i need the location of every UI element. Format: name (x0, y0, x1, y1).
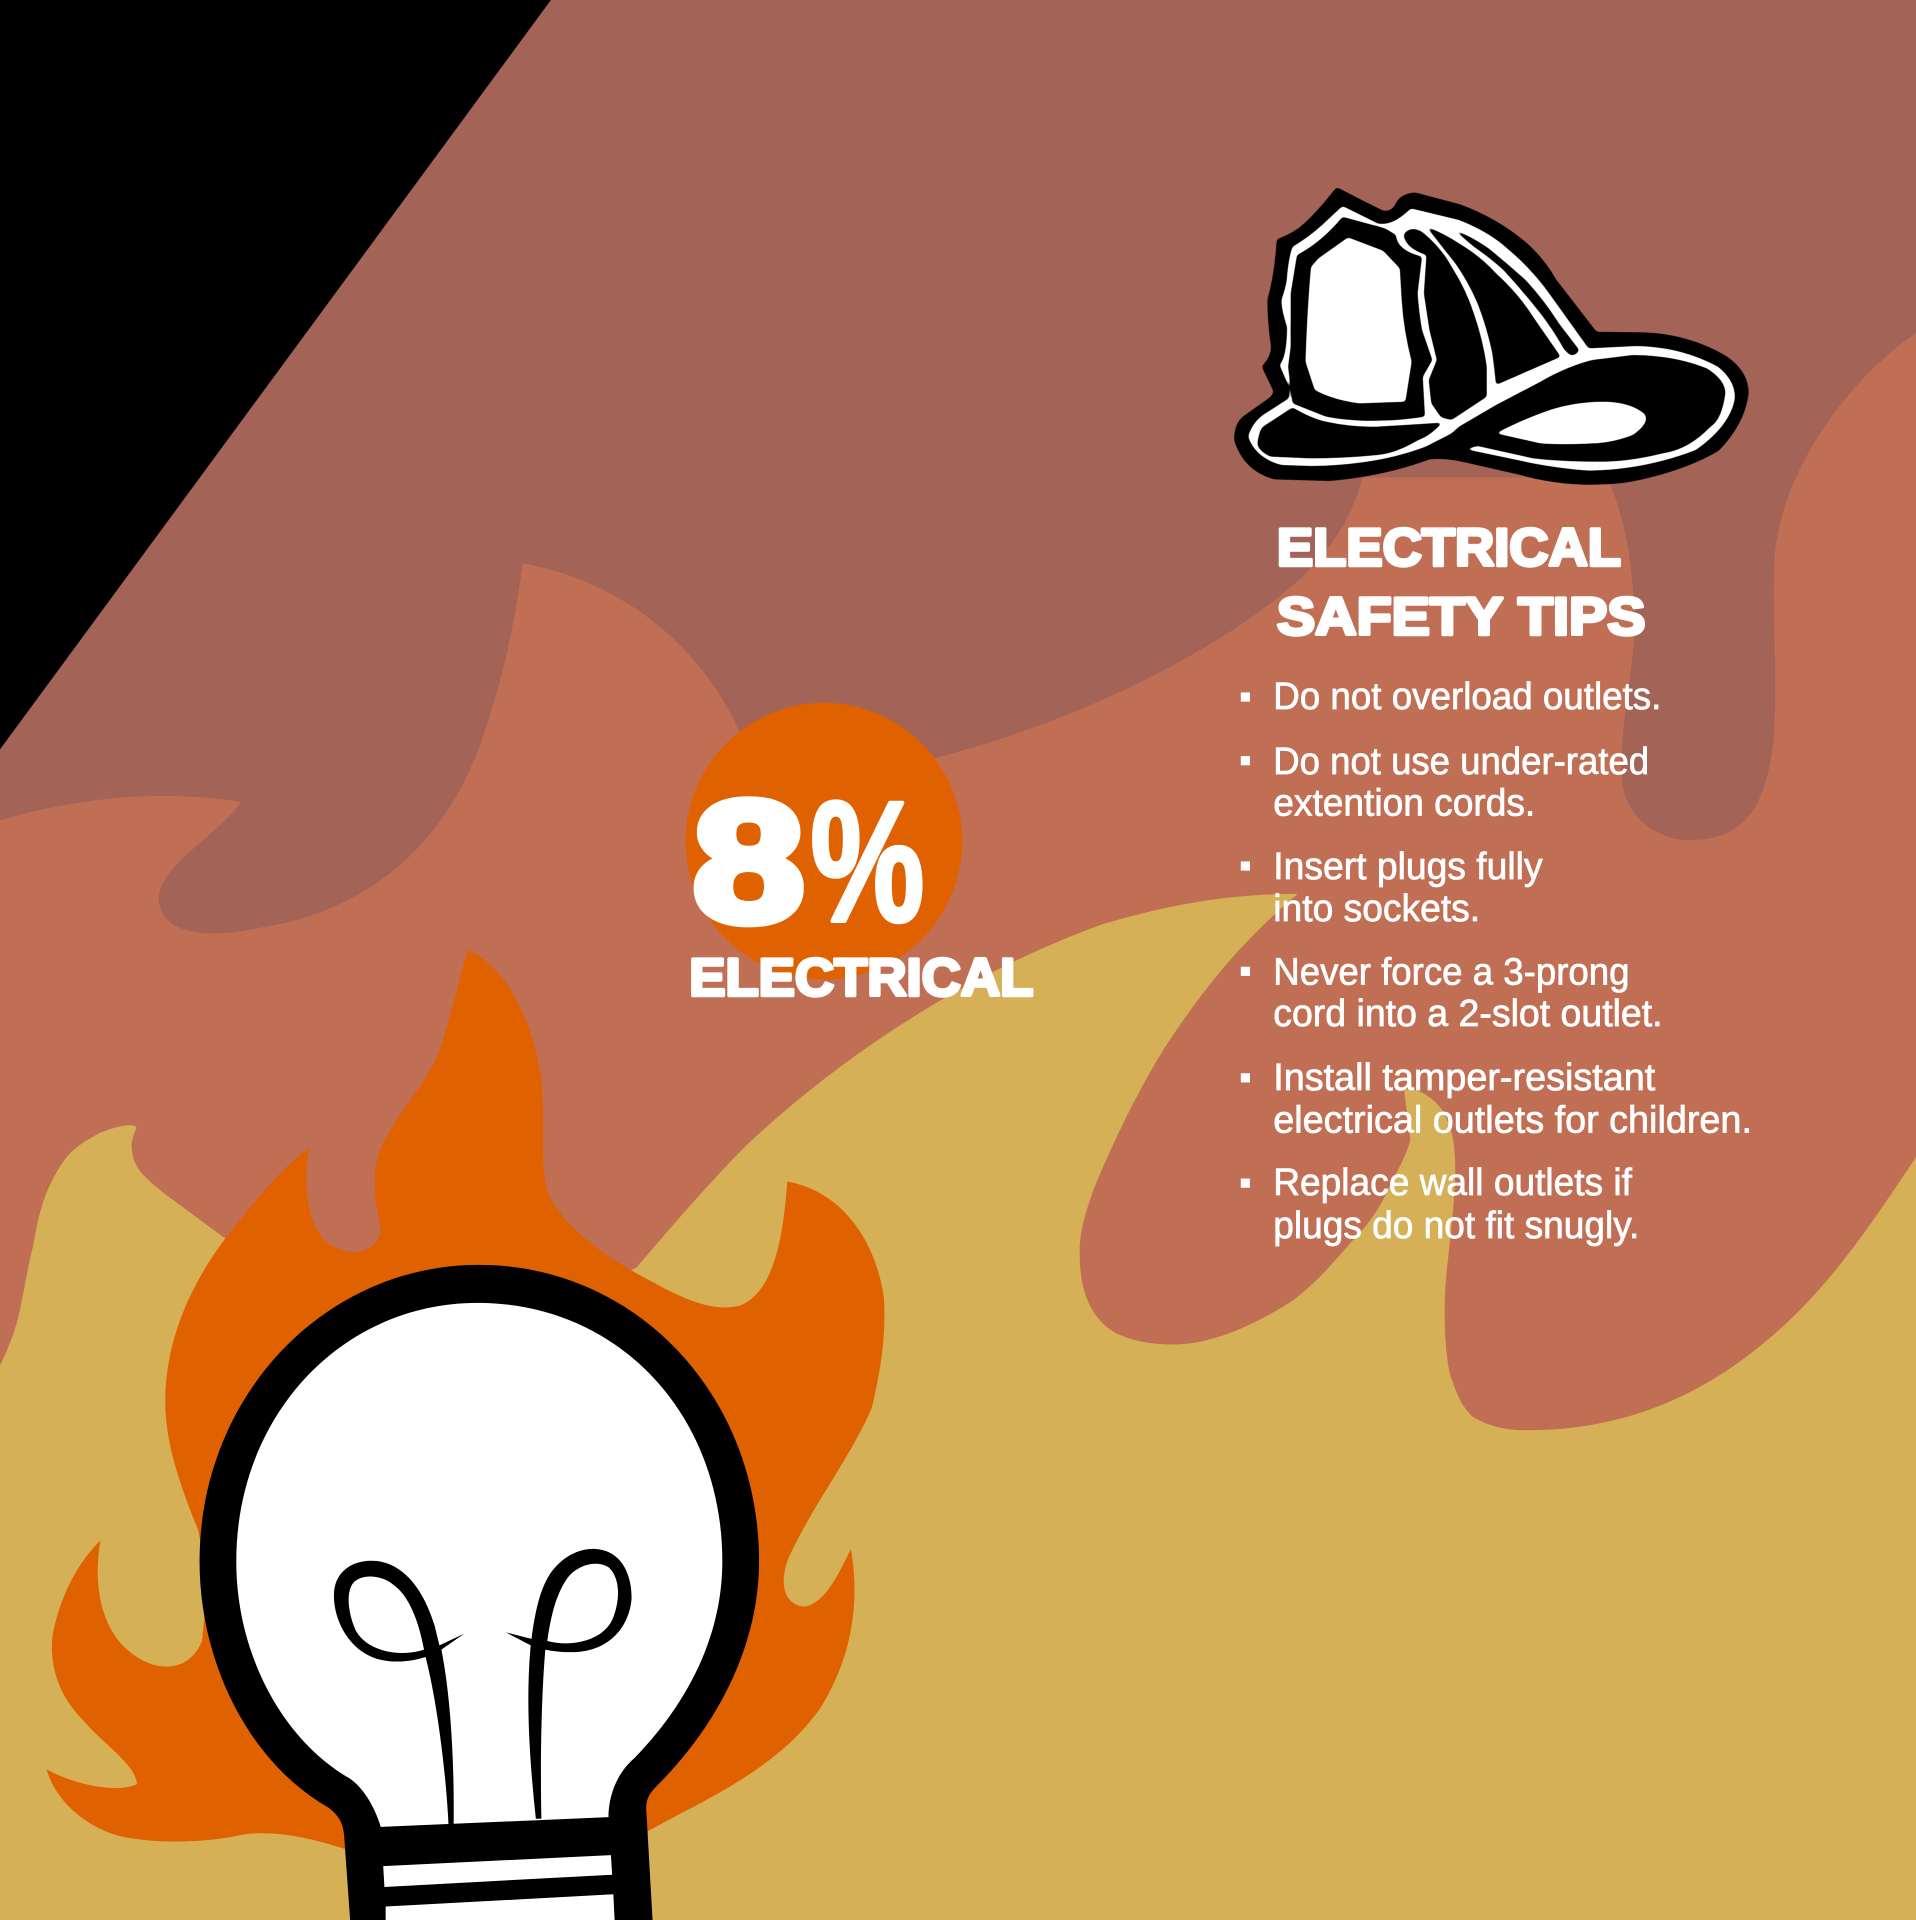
helmet crown stripe (1453, 229, 1579, 355)
tip 5: Install tamper-resistant (1273, 1057, 1656, 1099)
tip 3: Insert plugs fully (1273, 846, 1543, 888)
tip 1: Do not overload outlets. (1273, 676, 1661, 718)
tip 6: plugs do not fit snugly. (1273, 1205, 1639, 1247)
icon: fire helmet (1235, 188, 1748, 484)
stat: 8% electrical: % (810, 767, 924, 958)
helmet shield frame (1288, 217, 1432, 421)
tip 3 (1241, 846, 1543, 930)
tip 4: cord into a 2-slot outlet. (1273, 993, 1663, 1035)
helmet right brim (1437, 355, 1725, 462)
helmet left brim (1257, 407, 1442, 458)
safety tips list (1241, 676, 1752, 1247)
bulb glass (236, 1303, 722, 1827)
right filament (506, 1549, 632, 1819)
tip 6: Replace wall outlets if (1273, 1162, 1632, 1204)
flame layer: yellow (0, 894, 1916, 1920)
icon: light bulb (200, 1265, 759, 1920)
helmet brim highlight (1496, 402, 1646, 444)
left filament (334, 1561, 464, 1824)
tip 5 (1241, 1057, 1752, 1142)
bulb base stripes (383, 1855, 615, 1920)
tip 2: extention cords. (1273, 783, 1535, 825)
helmet crown panel (1426, 227, 1561, 385)
stat: 8% electrical: 8 (693, 767, 804, 958)
helmet silhouette (1235, 188, 1748, 484)
stat: 8% electrical: ELECTRICAL (689, 949, 1033, 1008)
heading: electrical safety tips (1277, 519, 1645, 646)
heading: electrical safety tips: SAFETY TIPS (1277, 587, 1645, 646)
tip 4 (1241, 951, 1663, 1035)
tip 6 (1241, 1162, 1639, 1247)
flames around bulb (47, 950, 884, 1910)
stat circle (686, 703, 962, 980)
helmet white lines (1248, 206, 1735, 471)
tip 2 (1241, 741, 1649, 825)
tip 3: into sockets. (1273, 888, 1480, 930)
helmet middle panel (1404, 229, 1487, 420)
tip 4: Never force a 3-prong (1273, 951, 1630, 993)
black corner triangle (0, 0, 551, 749)
heading: electrical safety tips: ELECTRICAL (1277, 519, 1621, 578)
helmet shield (1305, 237, 1412, 403)
stat: 8% electrical (689, 767, 1033, 1008)
tip 2: Do not use under-rated (1273, 741, 1649, 783)
bulb outline (200, 1265, 759, 1920)
tip 5: electrical outlets for children. (1273, 1100, 1752, 1142)
